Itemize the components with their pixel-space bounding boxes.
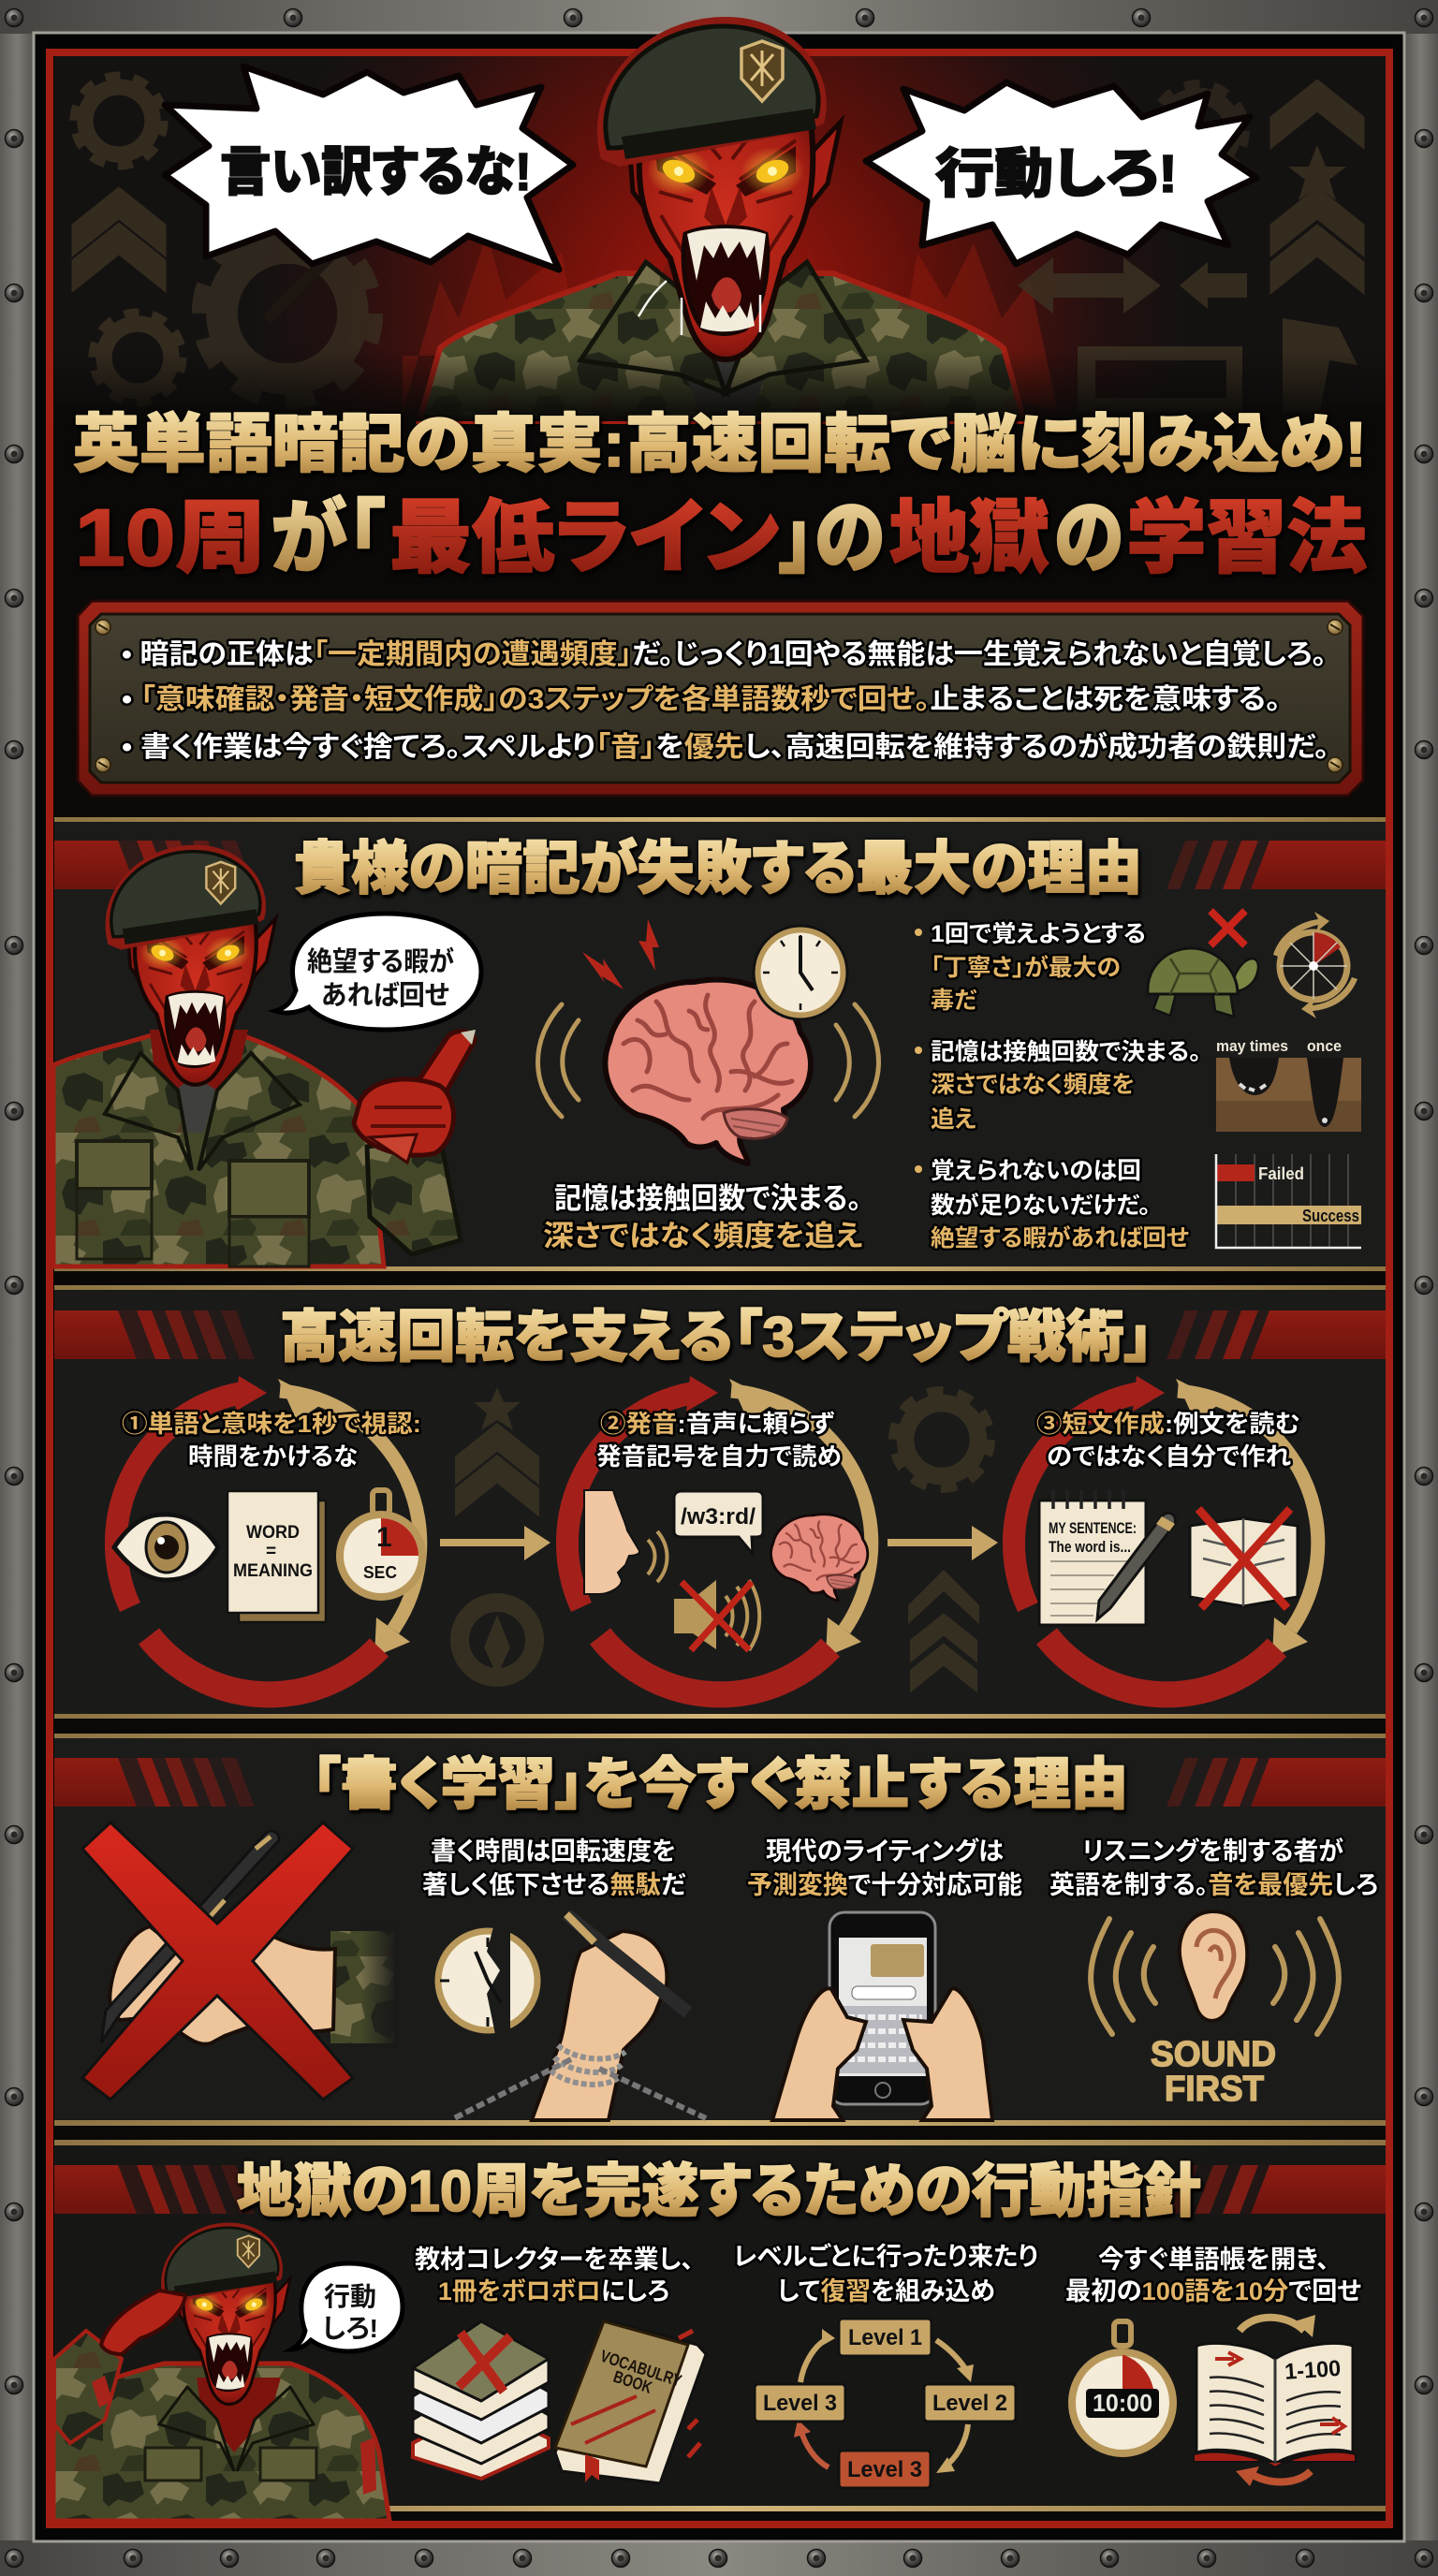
speech burst: 言い訳するな: 言い訳するな! xyxy=(220,142,532,202)
icon: hand writing crossed out xyxy=(82,1822,398,2100)
lightning bolts xyxy=(582,919,659,989)
icon: 10 minute stopwatch xyxy=(1072,2321,1173,2453)
section 1 heading xyxy=(54,836,1386,901)
icon: vocabulary book: BOOK xyxy=(611,2367,654,2397)
action 3 text: 今すぐ単語帳を開き、 xyxy=(1098,2246,1329,2274)
section 1 heading: 貴様の暗記が失敗する最大の理由 xyxy=(294,836,1142,901)
reason 1: 毒だ xyxy=(931,988,977,1014)
icon: stopwatch 1 sec: 1 xyxy=(376,1522,392,1553)
reason: listening: リスニングを制する者が xyxy=(1082,1837,1343,1866)
level 2 xyxy=(924,2384,1016,2422)
section 4 heading: 地獄の10周を完遂するための行動指針 xyxy=(237,2159,1201,2224)
summary panel xyxy=(78,601,1363,796)
main title: 学習法 xyxy=(1126,493,1367,583)
level 2: Level 2 xyxy=(932,2391,1007,2416)
icon: word card xyxy=(227,1491,326,1622)
hero demon soldier xyxy=(54,17,1386,421)
reason 3 xyxy=(915,1158,1189,1251)
icon: eye xyxy=(114,1515,218,1580)
speech bubble xyxy=(291,2263,403,2351)
main title xyxy=(73,409,1367,583)
drool xyxy=(638,281,760,335)
step 2 text: ②発音:音声に頼らず xyxy=(600,1410,834,1438)
icon: notepad: The word is... xyxy=(1049,1538,1131,1556)
action 2 text xyxy=(733,2242,1038,2305)
reason: predictive input xyxy=(747,1837,1022,1899)
cycle arrows around book xyxy=(1236,2315,1315,2486)
cycle ring 1 xyxy=(116,1376,420,1694)
action 1 text: 教材コレクターを卒業し、 xyxy=(415,2246,694,2274)
icon: stack of books crossed out xyxy=(413,2321,549,2479)
icon: phonetic speech bubble xyxy=(674,1491,763,1554)
icon: word card: WORD xyxy=(246,1523,300,1543)
brain with clock xyxy=(537,919,878,1164)
pointing demon soldier xyxy=(53,845,476,1266)
speech bubble: あれば回せ xyxy=(321,980,449,1011)
brain caption: 記憶は接触回数で決まる。 xyxy=(554,1182,861,1215)
main title: 10周 xyxy=(75,493,266,583)
reason 1: 1回で覚えようとする xyxy=(931,921,1146,947)
neck and shirt xyxy=(648,253,805,384)
speech bubble xyxy=(275,914,481,1030)
reason: listening: 英語を制する。音を最優先しろ xyxy=(1049,1871,1378,1899)
icon: open book 1-100 xyxy=(1194,2344,1356,2467)
action 1 text: 1冊をボロボロにしろ xyxy=(438,2277,669,2305)
sound arcs xyxy=(537,1004,878,1117)
level 3 left xyxy=(755,2384,845,2422)
step 1: 時間をかけるな xyxy=(188,1442,358,1471)
icon: ear with sound waves xyxy=(1091,1911,1339,2034)
section 3 heading: 「書く学習」を今すぐ禁止する理由 xyxy=(312,1753,1128,1816)
icon: pits many times vs once xyxy=(1216,1037,1361,1132)
icon: notepad xyxy=(1039,1490,1146,1625)
action 3 text: 最初の100語を10分で回せ xyxy=(1065,2277,1361,2305)
level 1 xyxy=(839,2319,932,2356)
step 3 text: ③短文作成 :例文を読む xyxy=(1036,1410,1300,1438)
summary panel: • 「意味確認・発音・短文作成」の3ステップを各単語数秒で回せ。 止まることは死を意味する。 xyxy=(122,684,1281,715)
reason 1 xyxy=(915,921,1146,1014)
bar chart: failed vs success: Failed xyxy=(1258,1164,1304,1183)
action 2 text: して復習を組み込め xyxy=(777,2277,995,2305)
uniform xyxy=(419,273,1024,421)
icon: smartphone in hands xyxy=(772,1912,992,2120)
reason 2: 記憶は接触回数で決まる。 xyxy=(931,1039,1201,1065)
icon: small brain xyxy=(771,1515,868,1601)
speech bubble: 絶望する暇が xyxy=(307,945,454,977)
icon: turtle and wheel xyxy=(1148,911,1357,1018)
head xyxy=(597,17,841,359)
level 3 bottom: Level 3 xyxy=(847,2457,922,2482)
main title: 」の xyxy=(779,493,885,583)
reason 2: 追え xyxy=(931,1106,976,1133)
icon: pits many times vs once: may times xyxy=(1216,1037,1288,1055)
reason: writing is slow: 著しく低下させる無駄だ xyxy=(422,1871,685,1899)
step 3 xyxy=(1014,1376,1318,1694)
brain caption: 深さではなく頻度を追え xyxy=(543,1220,863,1252)
speech bubble: 行動 xyxy=(324,2282,376,2311)
cycle arrows xyxy=(800,2338,968,2467)
main title: の xyxy=(1054,493,1123,583)
arrow 1 to 2 xyxy=(440,1526,550,1560)
section backgrounds and dividers xyxy=(54,817,1386,2521)
reason 3: 数が足りないだけだ。 xyxy=(931,1192,1151,1219)
level cycle diagram xyxy=(755,2319,1016,2488)
icon: broken clock xyxy=(438,1924,537,2039)
reason: listening xyxy=(1049,1837,1378,1899)
section 1: why memorising fails xyxy=(53,836,1386,1266)
reason 3: 絶望する暇があれば回せ xyxy=(931,1224,1189,1251)
icon: crossed out book xyxy=(1190,1509,1298,1608)
sound first label: SOUND xyxy=(1151,2035,1276,2074)
speech burst: 言い訳するな xyxy=(165,66,573,270)
reason: predictive input: 予測変換で十分対応可能 xyxy=(747,1871,1022,1899)
icon: stopwatch 1 sec: SEC xyxy=(363,1563,397,1582)
reason 2 xyxy=(915,1039,1201,1133)
brain caption xyxy=(543,1182,863,1252)
icon: muted speaker xyxy=(674,1580,759,1650)
hero background xyxy=(54,56,1386,421)
main title: 英単語暗記の真実:高速回転で脳に刻み込め! xyxy=(73,409,1367,480)
section 3: ban writing xyxy=(54,1753,1386,2120)
action 3 text xyxy=(1065,2246,1361,2305)
step 1 text: ①単語と意味を1秒で視認: xyxy=(122,1410,421,1438)
bar chart: failed vs success: Success xyxy=(1302,1207,1359,1225)
speech bubble: しろ! xyxy=(322,2314,378,2343)
icon: 10 minute stopwatch: 10:00 xyxy=(1093,2389,1152,2417)
reason 2: 深さではなく頻度を xyxy=(931,1072,1135,1098)
speech burst: 行動しろ: 行動しろ! xyxy=(935,144,1178,204)
summary panel: • 暗記の正体は「一定期間内の遭遇頻度」 だ。じっくり1回やる無能は一生覚えられないと自覚しろ。 xyxy=(122,639,1327,670)
main title: 最低ライン xyxy=(389,493,779,583)
level 3 left: Level 3 xyxy=(763,2391,837,2416)
reason: writing is slow: 書く時間は回転速度を xyxy=(431,1837,676,1866)
sound first label xyxy=(1151,2035,1276,2109)
icon: open book 1-100: 1-100 xyxy=(1284,2356,1342,2385)
main title: が「 xyxy=(271,493,385,583)
cycle ring 2 xyxy=(567,1376,872,1694)
sound first label: FIRST xyxy=(1165,2070,1264,2109)
icon: notepad: MY SENTENCE: xyxy=(1049,1519,1137,1537)
icon: vocabulary book: VOCABULRY xyxy=(598,2347,684,2391)
saluting demon soldier xyxy=(53,2223,389,2521)
icon: pen xyxy=(1097,1513,1176,1619)
icon: speaking face xyxy=(584,1490,667,1594)
collars xyxy=(580,262,726,393)
step 1 xyxy=(114,1376,422,1694)
section 2: 3 step tactics xyxy=(54,1306,1386,1694)
watermark insignia xyxy=(455,1387,990,1692)
icon: phonetic speech bubble: /w3:rd/ xyxy=(681,1504,756,1530)
reason 1: 「丁寧さ」が最大の xyxy=(931,954,1121,981)
reason 3: 覚えられないのは回 xyxy=(931,1158,1141,1184)
section 2 heading xyxy=(54,1306,1386,1368)
step 2: 発音記号を自力で読め xyxy=(596,1442,842,1471)
icon: vocabulary book xyxy=(555,2321,706,2483)
bar chart: failed vs success xyxy=(1216,1154,1361,1248)
speech burst: 行動しろ xyxy=(866,82,1256,264)
section 4: action plan xyxy=(53,2159,1386,2521)
level 3 bottom xyxy=(839,2451,931,2488)
summary panel: • 書く作業は今すぐ捨てろ。スペルより 「音」を優先し、高速回転を維持するのが成功者の鉄則だ。 xyxy=(122,731,1329,763)
main title: 地獄 xyxy=(889,493,1049,583)
sleeve xyxy=(330,1926,398,2048)
icon: stopwatch 1 sec xyxy=(340,1490,422,1597)
icon: pits many times vs once: once xyxy=(1307,1037,1342,1055)
reason: predictive input: 現代のライティングは xyxy=(766,1837,1004,1866)
cycle ring 3 xyxy=(1014,1376,1318,1694)
reason: writing is slow xyxy=(422,1837,685,1899)
icon: word card: MEANING xyxy=(233,1561,313,1581)
level 1: Level 1 xyxy=(848,2325,922,2350)
clock xyxy=(754,926,847,1019)
icon: chained hand with pen xyxy=(454,1914,706,2120)
section 3 heading xyxy=(54,1753,1386,1816)
step 3: のではなく自分で作れ xyxy=(1047,1442,1291,1471)
arrow 2 to 3 xyxy=(888,1526,998,1560)
icon: word card: = xyxy=(266,1542,276,1561)
action 2 text: レベルごとに行ったり来たり xyxy=(733,2242,1038,2271)
step 2 xyxy=(567,1376,872,1694)
section 2 heading: 高速回転を支える「3ステップ戦術」 xyxy=(280,1306,1153,1368)
action 1 text xyxy=(415,2246,694,2305)
